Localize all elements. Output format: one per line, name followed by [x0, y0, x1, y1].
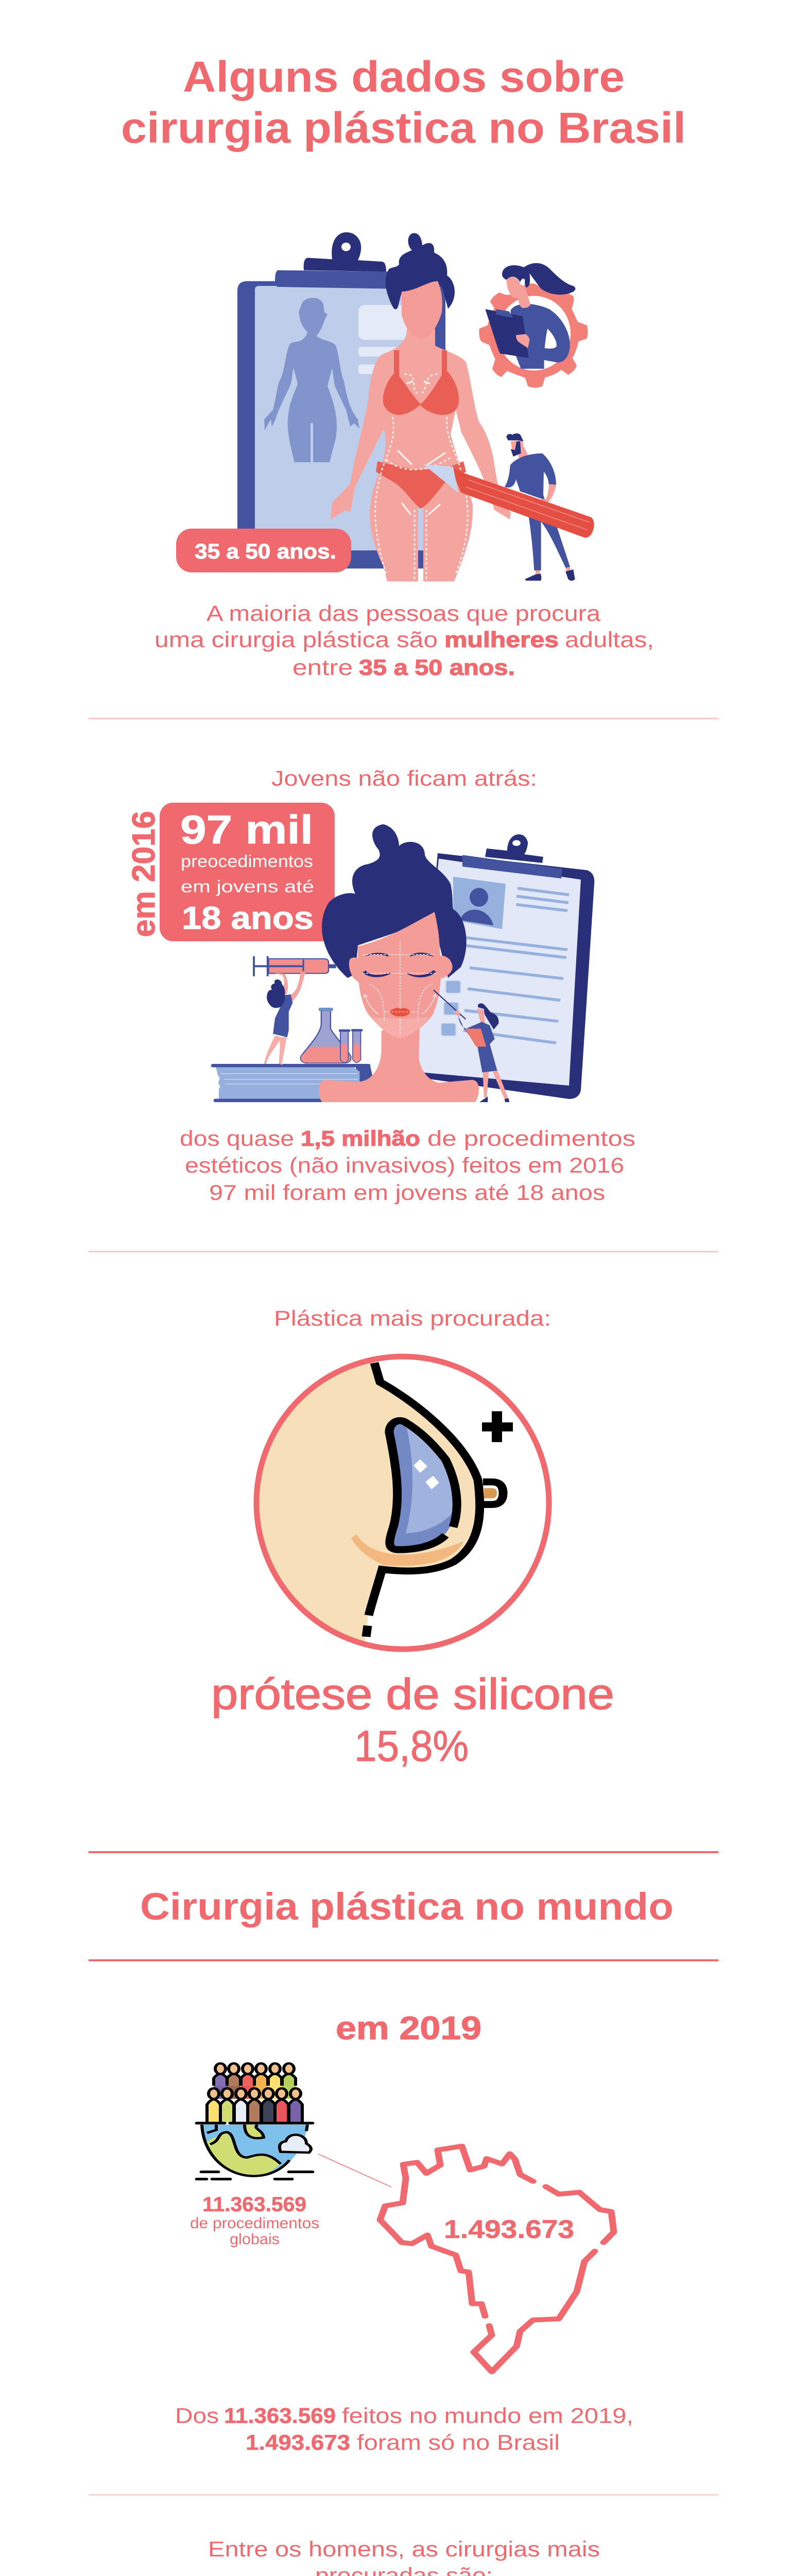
icon: main woman: [331, 233, 511, 581]
result: silicone implant: prótese de silicone: [211, 1670, 614, 1718]
text block: majority women: adultas,: [565, 628, 654, 652]
icon: clipboard: [237, 232, 445, 569]
map: Brazil outline: [380, 2146, 614, 2372]
icon: books: [211, 1064, 373, 1102]
result: silicone implant: 15,8%: [354, 1722, 469, 1770]
text block: 97 mil of 1.5 million: dos quase: [180, 1126, 294, 1150]
heading: men: [208, 2537, 600, 2576]
text block: world vs Brazil: feitos no mundo em 2019,: [342, 2403, 633, 2428]
rotated label: em 2016: em 2016: [126, 811, 162, 937]
text block: majority women: uma cirurgia plástica são: [154, 628, 438, 652]
callout: 97 mil: [160, 803, 335, 941]
title: Alguns dados sobre: [183, 53, 625, 101]
icon: body silhouette on clipboard: [264, 298, 359, 462]
icon: syringe: [253, 956, 366, 976]
illustration: woman with clipboard, surgeon and pencil: [237, 232, 594, 581]
text block: world vs Brazil: 11.363.569: [224, 2403, 336, 2428]
icon: patient clipboard: [416, 834, 594, 1099]
text: global procedures: [190, 2193, 319, 2248]
connector line: [318, 2154, 391, 2187]
text: global procedures: de procedimentos: [190, 2215, 319, 2232]
title: cirurgia plástica no Brasil: [121, 104, 686, 152]
text block: majority women: [154, 601, 654, 680]
text block: 97 mil of 1.5 million: estéticos (não invasivos) feitos em 2016: [185, 1153, 624, 1177]
icon: pencil: [423, 464, 594, 538]
text block: 97 mil of 1.5 million: 1,5 milhão: [301, 1126, 420, 1150]
callout: 97 mil: 97 mil: [180, 807, 313, 852]
illustration: face, syringe and clipboard: [211, 824, 594, 1102]
age badge: [176, 529, 351, 572]
icon: breast implant: [253, 1354, 552, 1652]
heading: men: Entre os homens, as cirurgias mais: [208, 2537, 600, 2561]
result: silicone implant: [211, 1670, 614, 1770]
icon: flask and test tubes: [301, 1008, 363, 1063]
title: [121, 53, 686, 152]
text block: world vs Brazil: Dos: [175, 2403, 219, 2428]
number: Brazil: 1.493.673: [444, 2215, 574, 2244]
heading: most sought: Plástica mais procurada:: [274, 1306, 551, 1330]
infographic canvas: [89, 60, 718, 2576]
age badge: 35 a 50 anos.: [195, 539, 336, 563]
icon: gear with woman: [479, 263, 588, 388]
callout: 97 mil: preocedimentos: [181, 852, 313, 871]
icon: woman neck and shoulders: [319, 1029, 479, 1102]
text block: majority women: A maioria das pessoas que procura: [206, 601, 600, 626]
section heading: world: Cirurgia plástica no mundo: [140, 1885, 674, 1928]
callout: 97 mil: em jovens até: [181, 877, 314, 896]
text block: 97 mil of 1.5 million: [180, 1126, 635, 1205]
subheading: em 2019: em 2019: [336, 2010, 481, 2046]
icon: people on globe: [197, 2063, 313, 2179]
text block: majority women: entre: [292, 655, 353, 680]
text block: world vs Brazil: 1.493.673: [246, 2430, 350, 2454]
text block: 97 mil of 1.5 million: 97 mil foram em jovens até 18 anos: [209, 1180, 605, 1205]
icon: small man holding pencil: [505, 433, 575, 581]
text block: 97 mil of 1.5 million: de procedimentos: [427, 1126, 635, 1150]
icon: small woman with syringe: [264, 973, 305, 1065]
callout: 97 mil: 18 anos: [182, 901, 314, 936]
text block: majority women: 35 a 50 anos.: [359, 655, 515, 680]
text block: world vs Brazil: foram só no Brasil: [357, 2430, 560, 2454]
icon: woman hair and face: [322, 824, 467, 978]
text: global procedures: 11.363.569: [202, 2193, 306, 2216]
icon: woman face: [349, 912, 453, 1038]
text block: majority women: mulheres: [444, 628, 559, 652]
icon: small woman with pointer: [434, 990, 509, 1102]
text block: world vs Brazil: [175, 2403, 633, 2454]
heading: young people: Jovens não ficam atrás:: [271, 766, 537, 790]
text: global procedures: globais: [230, 2231, 280, 2248]
